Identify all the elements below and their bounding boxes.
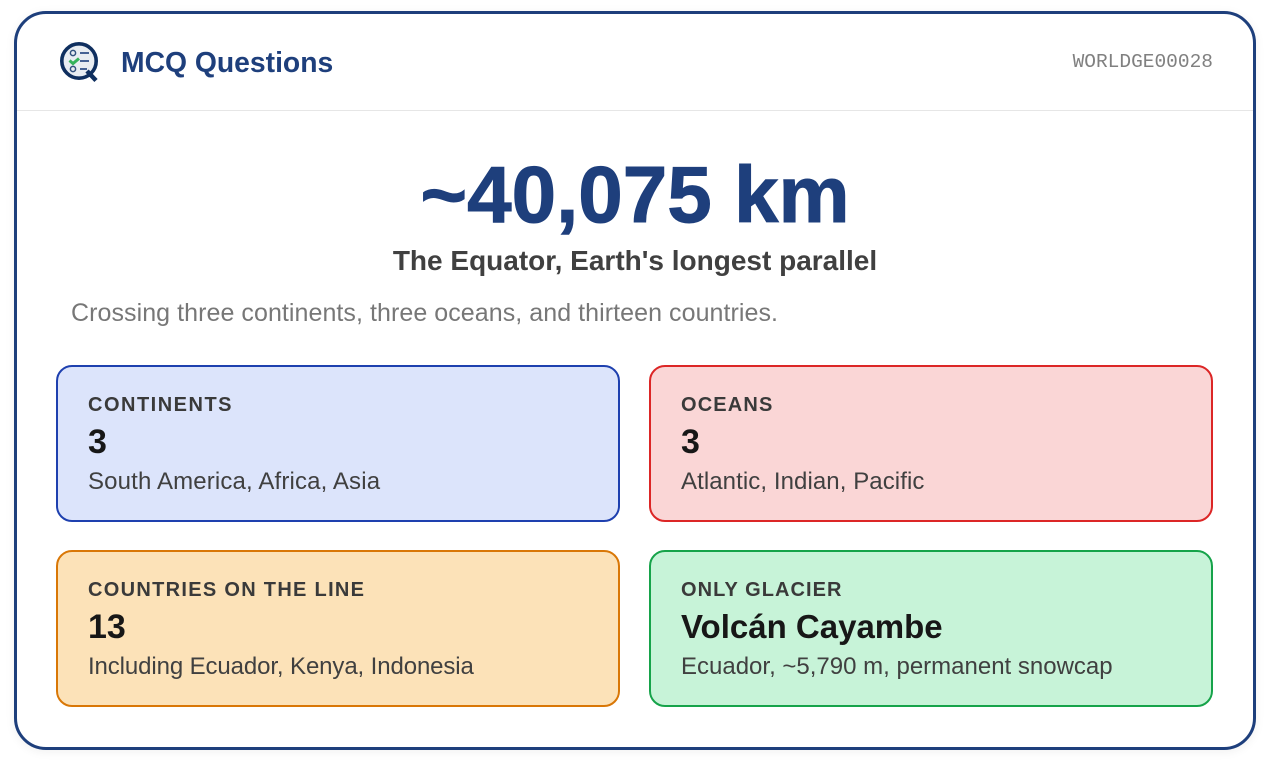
question code: WORLDGE00028 [1073,51,1213,73]
detail: Atlantic, Indian, Pacific [681,468,924,495]
header title: MCQ Questions [121,46,333,78]
label: CONTINENTS [88,394,233,416]
label: OCEANS [681,394,773,416]
detail: Including Ecuador, Kenya, Indonesia [88,653,474,680]
label: ONLY GLACIER [681,579,843,601]
subtitle: The Equator, Earth's longest parallel [393,245,877,276]
icon: MCQ logo [60,42,98,82]
panel: only glacier [649,550,1213,707]
big number heading: ~40,075 km [420,150,850,239]
detail: South America, Africa, Asia [88,468,380,495]
value: 3 [88,423,107,461]
panel: oceans [649,365,1213,522]
value: 3 [681,423,700,461]
value: 13 [88,608,126,646]
panel: continents [56,365,620,522]
label: COUNTRIES ON THE LINE [88,579,365,601]
detail: Ecuador, ~5,790 m, permanent snowcap [681,653,1113,680]
description: Crossing three continents, three oceans, and thirteen countries. [71,299,778,327]
header divider [17,110,1253,111]
value: Volcán Cayambe [681,608,943,645]
panel: countries on the line [56,550,620,707]
